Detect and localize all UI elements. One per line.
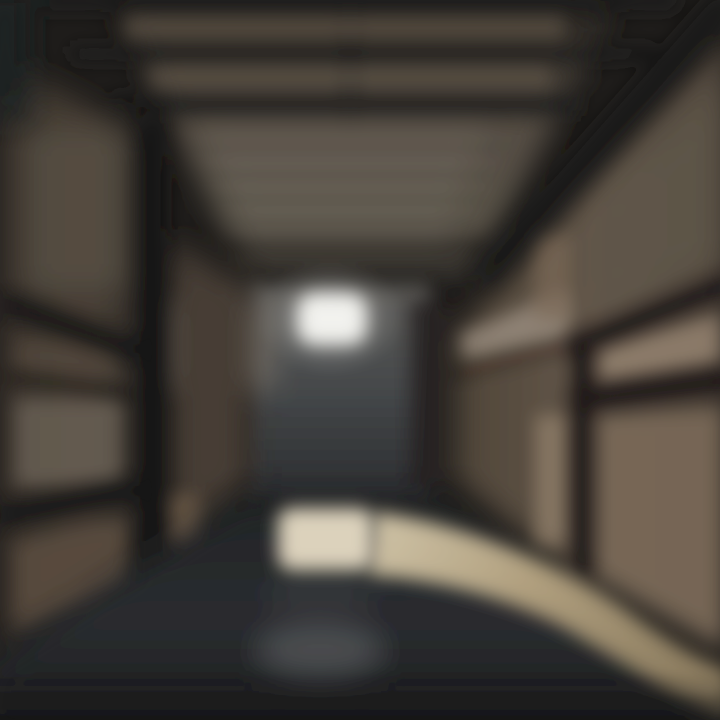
floor: [0, 500, 720, 720]
ceiling light: [255, 258, 405, 378]
back wall: [165, 285, 455, 500]
right wall shelves: [455, 10, 720, 660]
vignette: [0, 695, 720, 720]
ceiling: [40, 0, 680, 280]
left wall shelves: [0, 0, 250, 650]
floor light streak: [278, 508, 720, 720]
